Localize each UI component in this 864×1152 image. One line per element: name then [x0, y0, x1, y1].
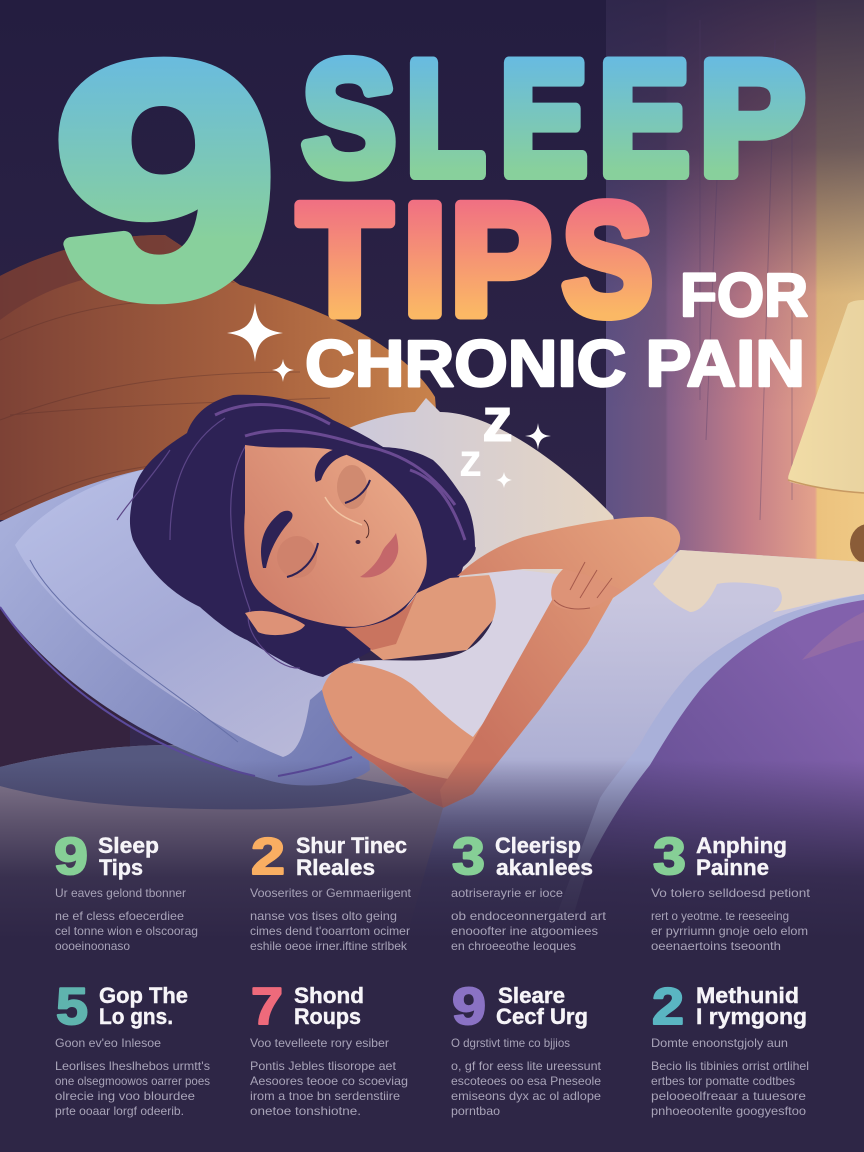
- sparkle large: [227, 303, 283, 362]
- title: SLEEP: L: [406, 28, 485, 209]
- tip 8: Becio lis tibinies orrist ortlihel: [651, 1059, 809, 1073]
- neck shadow: [345, 593, 417, 650]
- tip 4: [651, 828, 811, 953]
- tip 8: [651, 978, 809, 1118]
- title: TIPS: I: [403, 172, 447, 348]
- tip 6: 7: [251, 978, 283, 1036]
- bed base and floor shadow: [0, 600, 520, 960]
- tip 4: rert o yeotme. te reeseeing: [651, 909, 789, 923]
- table lamp: [788, 300, 864, 564]
- tip 8: I rymgong: [696, 1004, 807, 1029]
- front sheet: [400, 550, 864, 960]
- tip 5: Lo gns.: [99, 1004, 173, 1029]
- eyelash near: [287, 543, 318, 577]
- tip 2: nanse vos tises olto geing: [250, 909, 397, 923]
- tip 7: Sleare: [498, 983, 565, 1008]
- blanket: [540, 594, 864, 960]
- face: [244, 445, 427, 627]
- tip 6: onetoe tonshiotne.: [250, 1104, 361, 1118]
- tip 2: Rleales: [296, 855, 375, 880]
- tip 4: Anphing: [696, 833, 787, 858]
- tip 6: Shond: [294, 983, 364, 1008]
- tip 4: oeenaertoins tseoonth: [651, 939, 781, 953]
- tip 2: [250, 828, 412, 953]
- eyelash far: [345, 480, 370, 503]
- title: TIPS: P: [450, 171, 551, 348]
- eyebrow near: [261, 511, 293, 568]
- tip 5: [55, 978, 210, 1118]
- tip 7: escoteoes oo esa Pneseole: [451, 1074, 601, 1088]
- nostril: [356, 540, 360, 544]
- near arm: [322, 662, 500, 808]
- tip 5: prte ooaar lorgf odeerib.: [55, 1104, 184, 1118]
- tip 4: er pyrriumn gnoje oelo elom: [651, 924, 808, 938]
- tip 3: ob endoceonnergaterd art: [451, 909, 607, 923]
- tip 1: oooeinoonaso: [55, 939, 130, 953]
- tip 8: 2: [652, 978, 684, 1036]
- tip 2: eshile oeoe irner.iftine strlbek: [250, 939, 408, 953]
- tip 7: porntbao: [451, 1104, 500, 1118]
- title: CHRONIC PAIN: CHRONIC PAIN: [305, 326, 805, 400]
- curtain and lamp glow: [606, 0, 864, 590]
- tip 3: enooofter ine atgoomiees: [451, 924, 598, 938]
- neck and chest: [370, 575, 498, 660]
- main pillow: [0, 468, 370, 785]
- eyebrow far: [315, 448, 348, 482]
- tip 1: 9: [54, 828, 88, 886]
- tip 8: Domte enoonstgjoly aun: [651, 1036, 788, 1050]
- tip 6: irom a tnoe bn serdenstiire: [250, 1089, 400, 1103]
- tip 6: Roups: [294, 1004, 361, 1029]
- tip 4: 3: [653, 828, 686, 886]
- shoulder strap: [353, 660, 426, 696]
- tip 7: emiseons dyx ac ol adlope: [451, 1089, 601, 1103]
- tip 7: o, gf for eess lite ureessunt: [451, 1059, 602, 1073]
- arm shadow: [327, 712, 455, 808]
- tip 8: ertbes tor pomatte codtbes: [651, 1074, 795, 1088]
- title: SLEEP: S: [302, 29, 396, 209]
- tip 1: ne ef cless efoecerdiee: [55, 909, 184, 923]
- tip 3: Cleerisp: [495, 833, 581, 858]
- title: 9: 9: [53, 0, 277, 364]
- nose: [325, 497, 362, 525]
- sparkle near small z: [496, 472, 512, 488]
- tip 6: Aesoores teooe co scoeviag: [250, 1074, 408, 1088]
- sleeping z large: z: [482, 386, 513, 455]
- cheek / eyelid near: [277, 536, 317, 578]
- tip 1: [54, 828, 198, 953]
- tip 2: Shur Tinec: [296, 833, 407, 858]
- tip 2: Vooserites or Gemmaeriigent: [250, 886, 412, 900]
- tip 5: 5: [56, 978, 88, 1036]
- bottom fade panel: [0, 760, 864, 1152]
- tip 6: [250, 978, 408, 1118]
- tip 6: Pontis Jebles tlisorope aet: [250, 1059, 397, 1073]
- ear: [245, 611, 305, 635]
- forearm and hand: [440, 517, 680, 808]
- eyelid far: [337, 465, 367, 509]
- tip 5: olrecie ing voo blourdee: [55, 1089, 195, 1103]
- tip 5: Gop The: [99, 983, 188, 1008]
- back pillow: [340, 398, 640, 620]
- tip 6: Voo tevelleete rory esiber: [250, 1036, 389, 1050]
- tip 4: Vo tolero selldoesd petiont: [651, 886, 811, 900]
- tip 1: Ur eaves gelond tbonner: [55, 886, 186, 900]
- hair: [117, 395, 476, 677]
- tip 8: pelooeolfreaar a tuuesore: [651, 1089, 806, 1103]
- tip 7: [451, 978, 602, 1118]
- title: TIPS: S: [562, 172, 653, 348]
- tip 1: Tips: [99, 855, 143, 880]
- sparkle small: [272, 359, 294, 382]
- tip 2: 2: [251, 828, 285, 886]
- title: SLEEP: [302, 28, 805, 209]
- tip 2: cimes dend t'ooarrtom ocimer: [250, 924, 410, 938]
- title: SLEEP: P: [699, 28, 805, 208]
- lips: [360, 533, 398, 577]
- tip 1: cel tonne wion e olscoorag: [55, 924, 198, 938]
- tip 3: 3: [452, 828, 485, 886]
- headboard: [0, 235, 445, 520]
- title: FOR: FOR: [680, 261, 808, 329]
- tip 1: Sleep: [98, 833, 159, 858]
- tank top: [353, 566, 565, 745]
- tip 7: 9: [452, 978, 486, 1036]
- tip 3: [451, 828, 607, 953]
- tip 4: Painne: [696, 855, 769, 880]
- title: SLEEP: E: [599, 28, 690, 209]
- tip 7: Cecf Urg: [496, 1004, 588, 1029]
- tip 8: pnhoeootenlte googyesftoo: [651, 1104, 806, 1118]
- sparkle near z: [525, 423, 551, 450]
- tip 5: Goon ev'eo Inlesoe: [55, 1036, 161, 1050]
- tip 3: aotriserayrie er ioce: [451, 886, 563, 900]
- tip 7: O dgrstivt time co bjjios: [451, 1036, 570, 1050]
- title: SLEEP: E: [500, 29, 587, 209]
- cream sheet fold: [653, 550, 864, 612]
- sleeping z small: z: [459, 434, 482, 486]
- tip 3: en chroeeothe leoques: [451, 939, 576, 953]
- tip 5: one olsegmoowos oarrer poes: [55, 1074, 210, 1088]
- title: TIPS: T: [298, 171, 392, 347]
- title: TIPS: [298, 171, 653, 348]
- tip 8: Methunid: [696, 983, 799, 1008]
- tip 3: akanlees: [496, 855, 593, 880]
- tip 5: Leorlises lheslhebos urmtt's: [55, 1059, 210, 1073]
